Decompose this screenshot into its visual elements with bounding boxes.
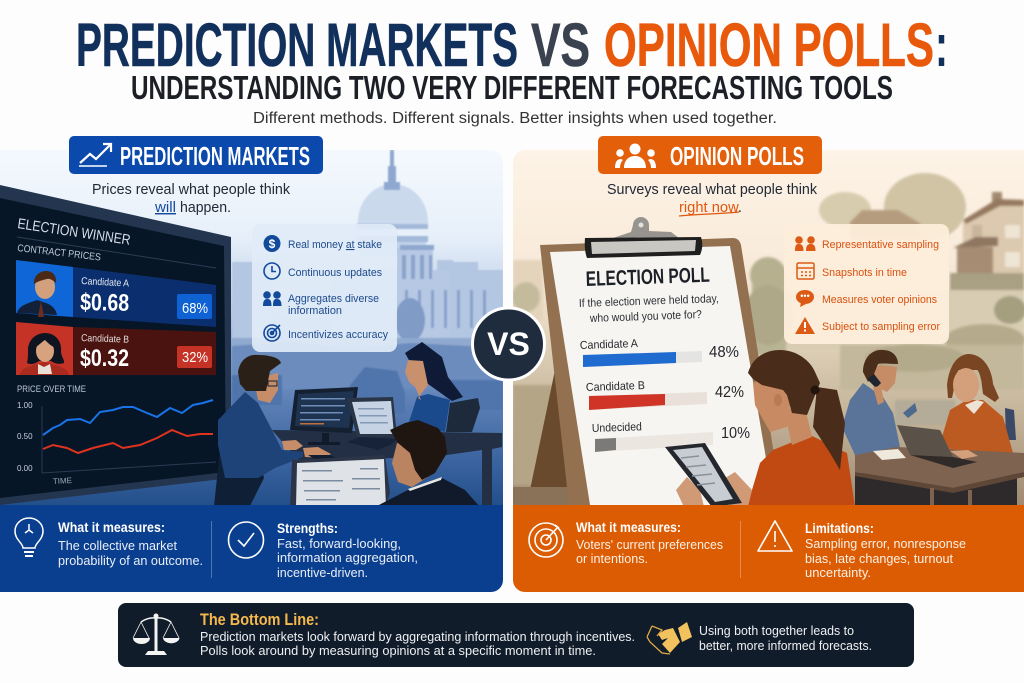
poll question: who would you vote for? [589, 309, 702, 325]
person: man in foreground with laptop [290, 420, 480, 507]
poll bar: candidate A: 48% [709, 344, 739, 361]
panel: prediction markets [0, 144, 503, 592]
title: VS [531, 11, 590, 79]
poll bar: candidate A: Candidate A [580, 338, 638, 352]
bottom line text: Prediction markets look forward by aggregating information through incentives. [200, 630, 635, 644]
text: limitations: Sampling error, nonresponse [805, 537, 966, 551]
tablet [665, 443, 742, 507]
item: sampling error: Subject to sampling error [822, 321, 940, 333]
poll question: If the election were held today, [579, 293, 719, 310]
text: markets tagline: happen. [180, 200, 231, 216]
row: candidate A: Candidate A [81, 276, 130, 290]
icon: target [529, 523, 563, 557]
row: candidate B: 32% [182, 350, 208, 366]
callout: market features [252, 224, 397, 352]
line chart: price over time: 0.50 [17, 432, 33, 441]
row: candidate A: $0.68 [80, 289, 129, 317]
poll question [580, 294, 718, 322]
text: polls tagline: Surveys reveal what people think [607, 182, 818, 198]
text: what it measures: probability of an outcome. [58, 554, 203, 568]
text: what it measures: Voters' current preferences [576, 538, 723, 552]
callout: poll features [784, 224, 949, 344]
person: woman at desk [405, 342, 480, 432]
bottom line text: Polls look around by measuring opinions at a specific moment in time. [200, 644, 596, 658]
icon: people [263, 291, 282, 306]
item: incentivizes: Incentivizes accuracy [288, 329, 388, 341]
icon: target [264, 325, 280, 341]
row: candidate B: Candidate B [81, 333, 130, 346]
icon: warning [795, 317, 815, 334]
handshake text: Using both together leads to [699, 624, 854, 638]
text: limitations: bias, late changes, turnout [805, 552, 954, 566]
text: strengths [277, 520, 418, 580]
election winner heading: ELECTION WINNER [16, 216, 132, 249]
text: what it measures [58, 519, 203, 568]
icon: warning triangle [758, 521, 792, 551]
text: limitations: Limitations: [805, 520, 874, 536]
item: representative sampling: Representative sampling [822, 239, 939, 251]
icon: light bulb [15, 518, 43, 556]
bottom line text [200, 630, 635, 658]
person: man at keyboard [214, 355, 338, 506]
vs badge: VS [487, 326, 530, 362]
icon: clock [264, 263, 280, 279]
text: strengths: Fast, forward-looking, [277, 537, 401, 551]
panel footer: market summary [0, 505, 503, 592]
person: man on phone [842, 350, 917, 455]
poll bar: candidate B: Candidate B [586, 380, 645, 394]
icon: dollar [264, 235, 280, 252]
illustration: poll scene [512, 150, 1024, 507]
text: strengths: Strengths: [277, 520, 338, 536]
line chart: price over time: PRICE OVER TIME [17, 384, 86, 395]
illustration: capitol and trading room [0, 144, 503, 507]
clipboard: election poll [540, 217, 782, 505]
laptop [897, 425, 978, 468]
panel: opinion polls [512, 150, 1024, 592]
icon: people [795, 236, 816, 251]
row: candidate B [16, 322, 216, 375]
item: aggregates: Aggregates diverse [288, 293, 379, 305]
line chart: price over time: TIME [53, 476, 72, 486]
capitol building [232, 144, 503, 413]
line chart: price over time: 1.00 [17, 401, 33, 410]
icon: dollar: $ [269, 237, 276, 251]
panel footer: poll summary [513, 505, 1024, 592]
text: what it measures: The collective market [58, 539, 178, 553]
icon: calendar [797, 263, 814, 279]
text: markets tagline: will [154, 200, 176, 216]
text: limitations: uncertainty. [805, 566, 871, 580]
line chart: price over time [17, 384, 216, 486]
poll bar: undecided [592, 421, 750, 452]
row: candidate A [16, 260, 216, 327]
icon: speech bubble: ••• [800, 291, 810, 301]
bottom line heading: The Bottom Line: [200, 611, 319, 629]
item: real money: Real money at stake [288, 239, 382, 251]
title: PREDICTION MARKETS [76, 11, 518, 79]
icon: speech bubble [796, 290, 814, 307]
clipboard clip [585, 217, 702, 258]
text: markets tagline: Prices reveal what people think [92, 182, 291, 198]
line chart: price over time: 0.00 [17, 464, 33, 473]
neighbourhood background [512, 173, 1024, 485]
row: candidate B: $0.32 [80, 345, 129, 372]
text: polls tagline: right now. [679, 200, 742, 216]
poll bar: candidate B: 42% [715, 384, 744, 401]
text: what it measures: What it measures: [576, 519, 681, 535]
handshake text: better, more informed forecasts. [699, 639, 872, 653]
badge: opinion polls [598, 136, 822, 174]
clipboard stand [530, 372, 567, 487]
text: what it measures: What it measures: [58, 519, 165, 535]
desktop monitor [290, 387, 358, 445]
poll bar: undecided: 10% [721, 425, 750, 442]
text: strengths: incentive-driven. [277, 566, 368, 580]
icon: people group [615, 144, 656, 168]
text: markets tagline [92, 182, 291, 216]
desk [272, 430, 502, 505]
person: woman with tablet [676, 350, 855, 507]
poll bar: candidate B [586, 380, 744, 410]
poll bar: candidate A [580, 338, 739, 367]
text: what it measures [576, 519, 723, 566]
text: polls tagline [607, 182, 818, 216]
contract prices label: CONTRACT PRICES [17, 243, 102, 264]
panel: the bottom line [118, 603, 914, 667]
handshake text [699, 624, 872, 653]
vs badge [472, 308, 544, 380]
icon: handshake [647, 622, 692, 654]
row: candidate A: 68% [182, 300, 208, 317]
poll bar: undecided: Undecided [592, 421, 642, 435]
poll heading: ELECTION POLL [585, 264, 710, 291]
item: voter opinions: Measures voter opinions [822, 294, 937, 306]
table [855, 447, 1024, 507]
person: woman with laptop [942, 354, 1016, 458]
item: information: information [288, 305, 342, 317]
badge: opinion polls: OPINION POLLS [670, 141, 804, 171]
text: what it measures: or intentions. [576, 552, 648, 566]
icon: scales [133, 614, 180, 655]
monitor: contract prices [0, 185, 231, 505]
tagline: Different methods. Different signals. Better insights when used together. [253, 110, 777, 127]
badge: prediction markets: PREDICTION MARKETS [120, 141, 310, 171]
icon: rising chart [79, 144, 111, 166]
item: continuous updates: Continuous updates [288, 267, 382, 279]
badge: prediction markets [69, 136, 323, 174]
text: strengths: information aggregation, [277, 551, 418, 565]
icon: check [228, 522, 264, 558]
text: limitations [805, 520, 966, 580]
item: snapshots: Snapshots in time [822, 267, 907, 279]
laptop [347, 397, 397, 450]
title: : [935, 11, 948, 79]
